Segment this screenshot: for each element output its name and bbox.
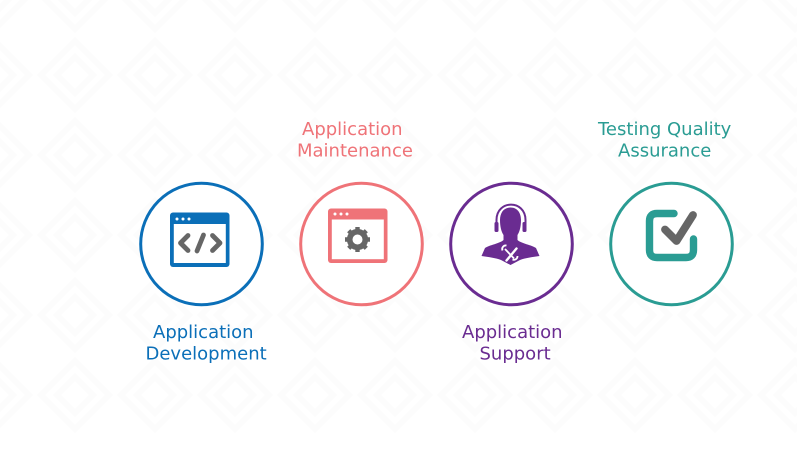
circle: Application Development [141, 183, 262, 305]
circle: Application Maintenance [301, 183, 422, 305]
label: Application Support: Support [480, 344, 551, 364]
label: Testing Quality Assurance: Testing Quality [597, 119, 732, 140]
icon: support agent with tools [482, 205, 540, 265]
item: Application Support [451, 183, 572, 364]
item: Testing Quality Assurance [597, 119, 732, 305]
label: Application Development: Development [146, 344, 267, 364]
icon: settings window [328, 208, 388, 263]
icon: code window [170, 212, 230, 267]
label: Application Support: Application [462, 322, 563, 343]
label: Application Maintenance: Maintenance [297, 140, 413, 162]
icon: checkbox [650, 214, 694, 258]
label: Application Maintenance: Application [302, 119, 403, 140]
circle: Testing Quality Assurance [611, 183, 732, 305]
item: Application Maintenance [297, 119, 422, 305]
item: Application Development [141, 183, 267, 364]
circle: Application Support [451, 183, 572, 305]
label: Application Development: Application [153, 322, 254, 343]
label: Testing Quality Assurance: Assurance [618, 140, 711, 162]
